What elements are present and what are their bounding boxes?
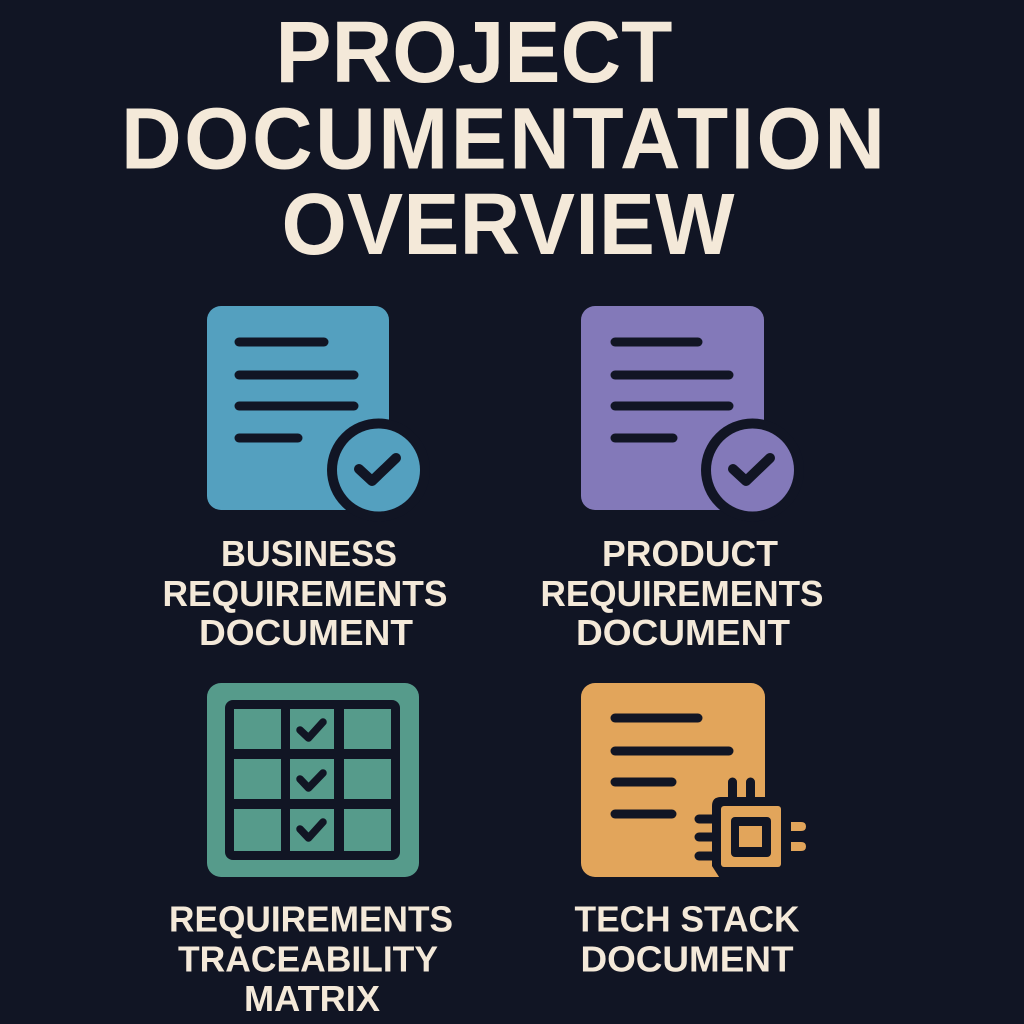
label: requirements traceability matrix xyxy=(169,898,453,1019)
label: requirements traceability matrix: TRACEABILITY xyxy=(178,938,438,980)
label: product requirements document: REQUIREMENTS xyxy=(540,573,824,614)
icon: requirements traceability matrix xyxy=(207,683,419,877)
label: tech stack document xyxy=(574,898,800,980)
title: DOCUMENTATION xyxy=(121,90,885,188)
title xyxy=(121,4,885,273)
label: product requirements document: DOCUMENT xyxy=(576,612,790,653)
icon: product requirements document xyxy=(581,306,804,522)
label: tech stack document: DOCUMENT xyxy=(580,938,794,980)
label: product requirements document: PRODUCT xyxy=(602,533,778,574)
icon: business requirements document xyxy=(207,306,430,522)
label: tech stack document: TECH STACK xyxy=(574,898,800,940)
title: OVERVIEW xyxy=(281,176,735,273)
title: PROJECT xyxy=(275,4,673,101)
label: business requirements document: DOCUMENT xyxy=(199,612,413,653)
label: business requirements document: BUSINESS xyxy=(221,533,397,574)
label: business requirements document: REQUIREMENTS xyxy=(162,573,448,614)
label: product requirements document xyxy=(540,533,824,653)
label: business requirements document xyxy=(162,533,448,653)
icon: tech stack document xyxy=(581,683,806,880)
label: requirements traceability matrix: REQUIREMENTS xyxy=(169,898,453,940)
label: requirements traceability matrix: MATRIX xyxy=(244,978,380,1019)
